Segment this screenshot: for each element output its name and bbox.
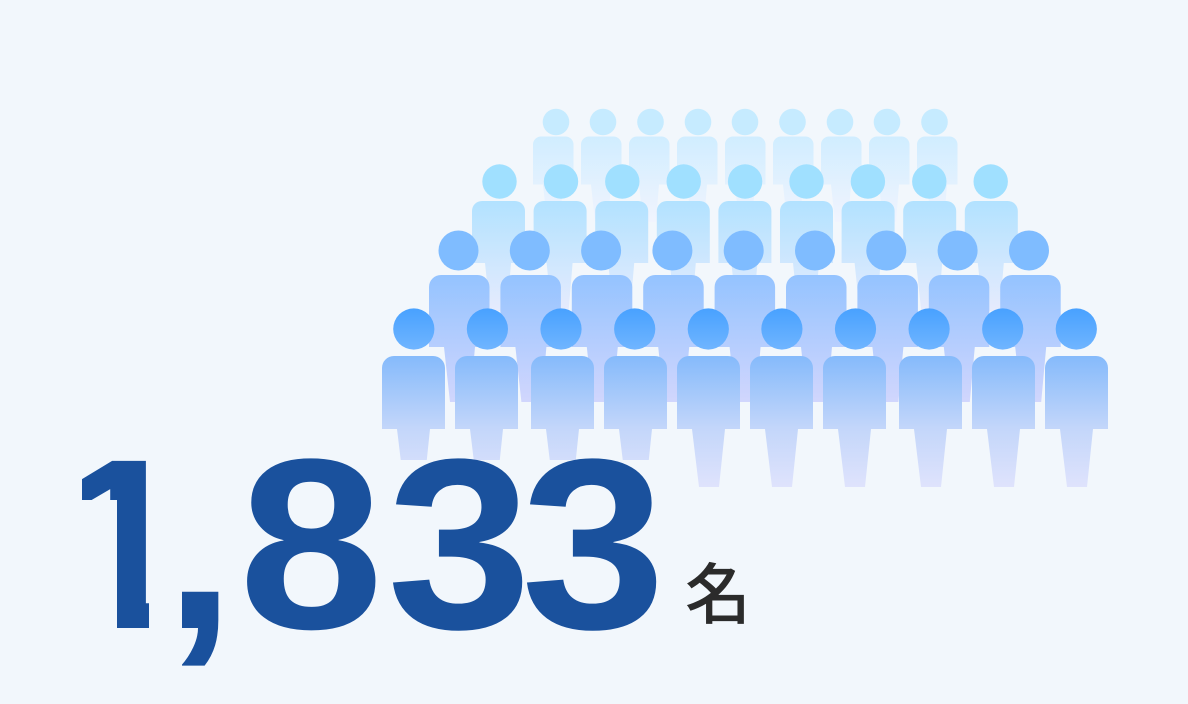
back row of people [533,109,958,222]
third row of people [472,164,1018,311]
infographic canvas [82,108,1108,666]
unit label: 名 [685,558,751,632]
second row of people [429,230,1061,402]
headline number: 1,833 [50,409,666,680]
front row of people [382,308,1108,487]
crowd of people icons [382,109,1108,487]
